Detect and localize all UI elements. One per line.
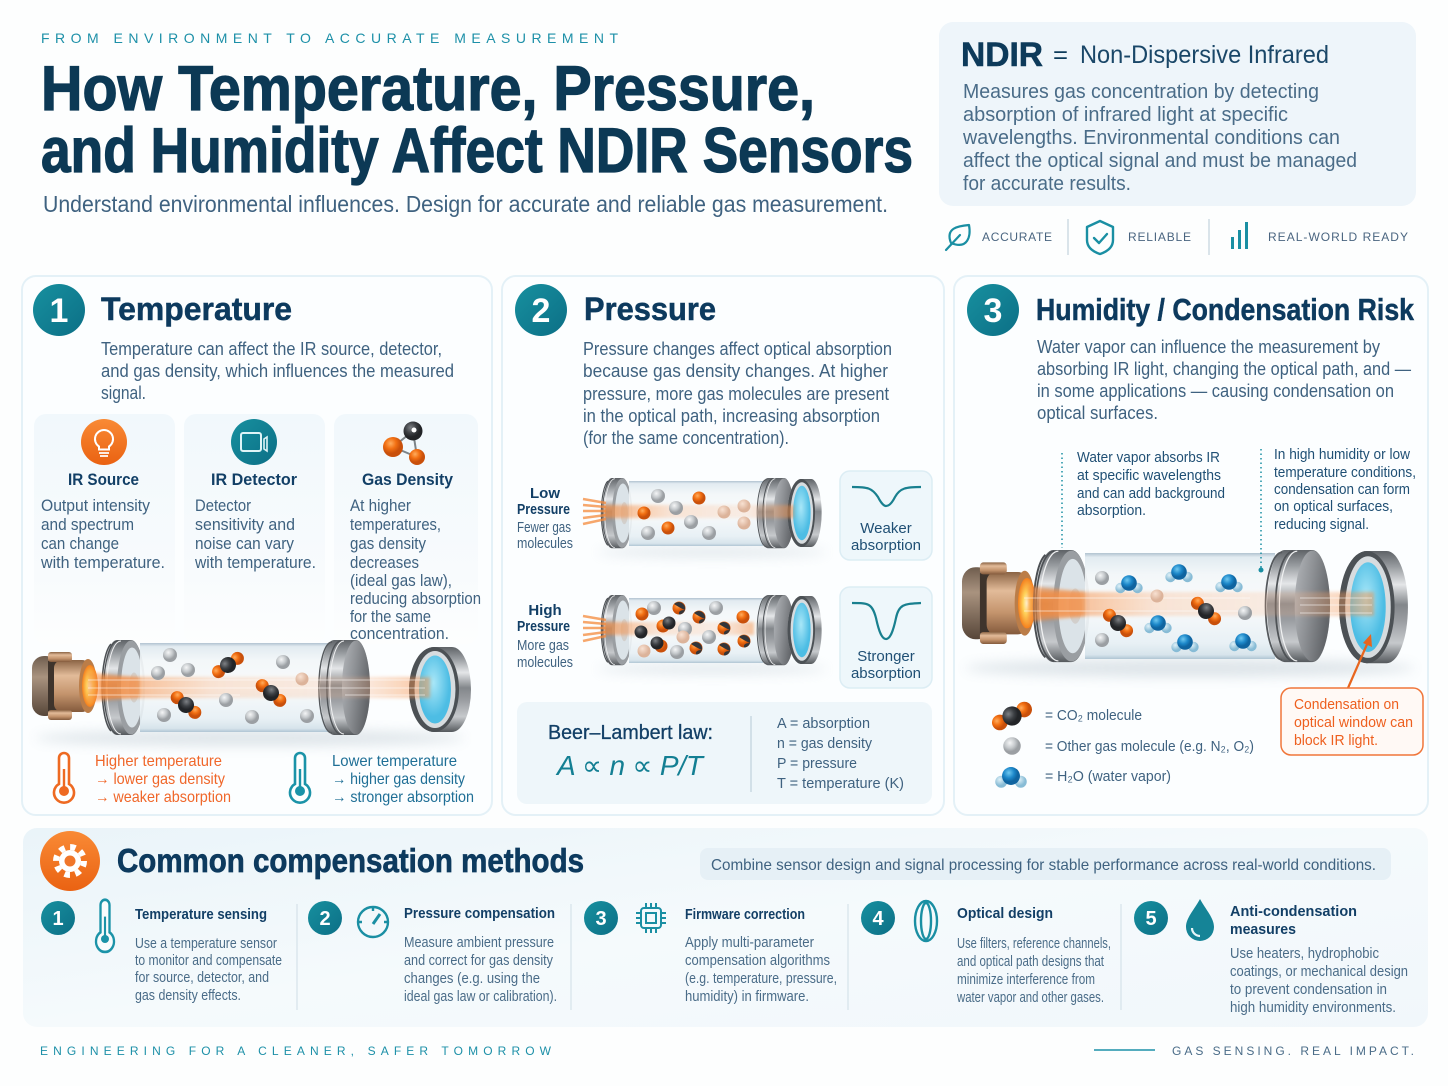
label: low pressure: Pressure <box>517 501 570 518</box>
note: lower temperature: Lower temperature <box>332 753 457 770</box>
card: IR Detector: sensitivity and <box>195 515 295 534</box>
badges row <box>946 219 1408 255</box>
title <box>41 54 913 186</box>
panel: NDIR definition: Measures gas concentration by detecting <box>963 81 1319 103</box>
label: high pressure: More gas <box>517 637 569 654</box>
card: stronger absorption <box>840 587 932 688</box>
icon: bulb <box>81 419 127 465</box>
intro text: absorbing IR light, changing the optical path, and — <box>1037 359 1411 379</box>
label: high pressure: molecules <box>517 654 573 671</box>
icon: leaf <box>946 225 970 250</box>
annotation: water vapor: absorption. <box>1077 502 1146 519</box>
intro text <box>101 339 454 403</box>
method 5: 5 <box>1145 908 1157 930</box>
method 5: measures <box>1230 921 1296 938</box>
method 3: Firmware correction <box>685 906 805 923</box>
card: IR Detector: IR Detector <box>211 470 297 489</box>
card: weaker absorption <box>840 471 932 560</box>
card: IR Source: and spectrum <box>41 515 134 534</box>
callout: condensation: optical window can <box>1294 714 1413 731</box>
number badge 3: 3 <box>984 292 1002 330</box>
card: Gas Density: temperatures, <box>350 515 441 534</box>
note: higher temperature: Higher temperature <box>95 753 222 770</box>
method 1: to monitor and compensate <box>135 953 282 969</box>
method 2: ideal gas law or calibration). <box>404 989 557 1005</box>
label: high pressure <box>517 602 573 671</box>
card: Gas Density: gas density <box>350 534 426 553</box>
card: IR Source <box>34 414 175 644</box>
label: high pressure: Pressure <box>517 618 570 635</box>
callout: condensation <box>1281 634 1423 755</box>
label: low pressure <box>517 485 573 552</box>
method 2: Measure ambient pressure <box>404 935 554 951</box>
annotation: condensation: on optical surfaces, <box>1274 498 1393 515</box>
subtitle: Understand environmental influences. Design for accurate and reliable gas measurement. <box>43 191 888 217</box>
annotation: water vapor <box>1062 449 1225 548</box>
box: Beer-Lambert law: A = absorption <box>777 715 870 732</box>
intro text <box>1037 337 1411 423</box>
box: Beer-Lambert law: n = gas density <box>777 735 872 752</box>
note: lower temperature <box>290 753 474 806</box>
card: Gas Density: reducing absorption <box>350 589 481 608</box>
card: IR Source: IR Source <box>68 470 139 489</box>
icon: shield <box>1087 221 1113 254</box>
note: lower temperature: → stronger absorption <box>332 789 474 806</box>
card: IR Source: with temperature. <box>40 553 165 572</box>
annotation: condensation: In high humidity or low <box>1274 446 1410 463</box>
box: Beer-Lambert law <box>517 702 932 804</box>
title: How Temperature, Pressure, <box>41 54 815 124</box>
panel: pressure <box>502 276 944 815</box>
method 3: 3 <box>595 908 607 930</box>
intro text: Pressure changes affect optical absorption <box>583 339 892 359</box>
note: higher temperature: → lower gas density <box>95 771 225 788</box>
annotation: water vapor: Water vapor absorbs IR <box>1077 449 1220 466</box>
panel: NDIR definition: = <box>1053 42 1068 69</box>
intro text: because gas density changes. At higher <box>583 361 888 381</box>
method 4: Optical design <box>957 905 1053 922</box>
annotation: condensation: condensation can form <box>1274 481 1410 498</box>
method 1 <box>41 900 297 1010</box>
method 5: coatings, or mechanical design <box>1230 964 1408 980</box>
method 3: humidity) in firmware. <box>685 989 809 1005</box>
card: IR Source: can change <box>41 534 119 553</box>
intro text: and gas density, which influences the measured <box>101 361 454 381</box>
callout: condensation: Condensation on <box>1294 696 1399 713</box>
label: low pressure: Low <box>530 485 560 502</box>
icon: gear <box>40 831 100 891</box>
method 3 <box>584 901 848 1010</box>
label: low pressure: molecules <box>517 535 573 552</box>
card: weaker absorption: absorption <box>851 537 921 554</box>
annotation: water vapor: and can add background <box>1077 485 1225 502</box>
summary pill <box>700 848 1391 880</box>
method 3: (e.g. temperature, pressure, <box>685 971 837 987</box>
method 1: gas density effects. <box>135 988 241 1004</box>
intro text: (for the same concentration). <box>583 428 789 448</box>
method 3: Apply multi-parameter <box>685 935 814 951</box>
icon: detector <box>231 419 277 465</box>
method 4: 4 <box>872 908 884 930</box>
card: IR Detector: noise can vary <box>195 534 294 553</box>
intro text: in the optical path, increasing absorption <box>583 406 880 426</box>
panel: NDIR definition: absorption of infrared light at specific <box>963 104 1288 126</box>
card: Gas Density: (ideal gas law), <box>350 571 452 590</box>
card: IR Detector: with temperature. <box>194 553 316 572</box>
method 5 <box>1134 899 1408 1016</box>
title: and Humidity Affect NDIR Sensors <box>41 116 913 186</box>
heading: Common compensation methods <box>117 842 584 879</box>
card: stronger absorption: Stronger <box>857 648 915 665</box>
method 5: high humidity environments. <box>1230 1000 1396 1016</box>
card: stronger absorption: absorption <box>851 665 921 682</box>
card: IR Detector: Detector <box>195 496 251 515</box>
heading: Temperature <box>101 291 292 327</box>
method 2: and correct for gas density <box>404 953 554 969</box>
icon: cold thermometer <box>290 753 310 803</box>
card: IR Source: Output intensity <box>41 496 150 515</box>
method 1: for source, detector, and <box>135 970 269 986</box>
badges row: REAL-WORLD READY <box>1268 230 1408 244</box>
method 4: Use filters, reference channels, <box>957 936 1111 952</box>
intro text: Temperature can affect the IR source, detector, <box>101 339 442 359</box>
icon: thermometer <box>96 900 114 952</box>
footer right: GAS SENSING. REAL IMPACT. <box>1172 1044 1414 1058</box>
label: low pressure: Fewer gas <box>517 519 571 536</box>
intro text: Water vapor can influence the measurement by <box>1037 337 1380 357</box>
icon: water drop <box>1186 899 1214 941</box>
box: Beer-Lambert law: Beer–Lambert law: <box>548 722 713 744</box>
method 2: Pressure compensation <box>404 905 555 922</box>
method 4: minimize interference from <box>957 972 1095 988</box>
number badge 2 <box>515 284 567 336</box>
annotation: condensation <box>1274 446 1416 533</box>
intro text: pressure, more gas molecules are present <box>583 384 889 404</box>
number badge 3 <box>967 284 1019 336</box>
legend: = Other gas molecule (e.g. N₂, O₂) <box>1045 738 1254 755</box>
low pressure tube <box>583 478 827 557</box>
card: Gas Density: decreases <box>350 553 419 572</box>
callout: condensation: block IR light. <box>1294 732 1378 749</box>
card: weaker absorption: Weaker <box>860 520 912 537</box>
high pressure tube <box>583 595 827 674</box>
icon: gauge <box>358 907 388 937</box>
card: IR Detector <box>184 414 325 644</box>
method 5: Anti-condensation <box>1230 903 1357 920</box>
method 4: water vapor and other gases. <box>956 990 1104 1006</box>
number badge 1: 1 <box>50 292 68 330</box>
method 4 <box>861 901 1121 1010</box>
footer left: ENGINEERING FOR A CLEANER, SAFER TOMORROW <box>40 1044 552 1058</box>
intro text: in some applications — causing condensation on <box>1037 381 1394 401</box>
method 3: compensation algorithms <box>685 953 830 969</box>
icon: lens <box>915 901 937 941</box>
method 1: Use a temperature sensor <box>135 936 277 952</box>
method 4: and optical path designs that <box>957 954 1104 970</box>
sensor tube illustration <box>32 640 471 746</box>
icon: molecule <box>383 422 425 465</box>
annotation: condensation: temperature conditions, <box>1274 464 1416 481</box>
panel: compensation methods <box>23 828 1428 1027</box>
method 1: 1 <box>52 908 64 930</box>
method 5: Use heaters, hydrophobic <box>1230 946 1379 962</box>
card: Gas Density: concentration. <box>350 624 449 643</box>
panel: NDIR definition: NDIR <box>961 36 1043 74</box>
panel: NDIR definition: for accurate results. <box>963 173 1131 195</box>
note: lower temperature: → higher gas density <box>332 771 465 788</box>
method 2 <box>308 901 571 1010</box>
legend: = CO₂ molecule <box>1045 707 1142 724</box>
intro text <box>583 339 892 448</box>
method 2: 2 <box>319 908 331 930</box>
icon: signal bars <box>1231 222 1248 249</box>
eyebrow heading: FROM ENVIRONMENT TO ACCURATE MEASUREMENT <box>41 30 618 46</box>
legend <box>988 697 1254 788</box>
note: higher temperature <box>54 753 231 806</box>
panel: NDIR definition: affect the optical signal and must be managed <box>963 150 1357 172</box>
panel: NDIR definition <box>939 22 1416 206</box>
intro text: signal. <box>101 383 146 403</box>
panel: humidity <box>954 276 1428 815</box>
icon: hot thermometer <box>54 753 74 803</box>
label: high pressure: High <box>528 602 562 619</box>
badges row: ACCURATE <box>982 230 1052 244</box>
box: Beer-Lambert law: P = pressure <box>777 755 857 772</box>
box: Beer-Lambert law: A ∝ n ∝ P/T <box>555 750 705 781</box>
card: Gas Density: Gas Density <box>362 470 454 489</box>
note: higher temperature: → weaker absorption <box>95 789 231 806</box>
card: Gas Density: for the same <box>350 607 431 626</box>
summary pill: Combine sensor design and signal processing for stable performance across real-world conditions. <box>711 857 1376 874</box>
panel: temperature <box>22 276 492 815</box>
icon: chip <box>636 903 666 933</box>
card: Gas Density: At higher <box>350 496 411 515</box>
method 2: changes (e.g. using the <box>404 971 540 987</box>
panel: NDIR definition: Non-Dispersive Infrared <box>1080 41 1329 69</box>
heading: Pressure <box>584 291 716 327</box>
intro text: optical surfaces. <box>1037 403 1158 423</box>
number badge 2: 2 <box>532 292 550 330</box>
legend: = H₂O (water vapor) <box>1045 768 1171 785</box>
sensor tube illustration with water vapor <box>962 449 1415 677</box>
annotation: water vapor: at specific wavelengths <box>1077 467 1221 484</box>
number badge 1 <box>33 284 85 336</box>
card: Gas Density <box>334 414 481 644</box>
panel: NDIR definition: wavelengths. Environmental conditions can <box>962 127 1340 149</box>
method 5: to prevent condensation in <box>1230 982 1387 998</box>
method 1: Temperature sensing <box>135 906 267 923</box>
box: Beer-Lambert law: T = temperature (K) <box>777 775 904 792</box>
badges row: RELIABLE <box>1128 230 1191 244</box>
annotation: condensation: reducing signal. <box>1274 516 1369 533</box>
